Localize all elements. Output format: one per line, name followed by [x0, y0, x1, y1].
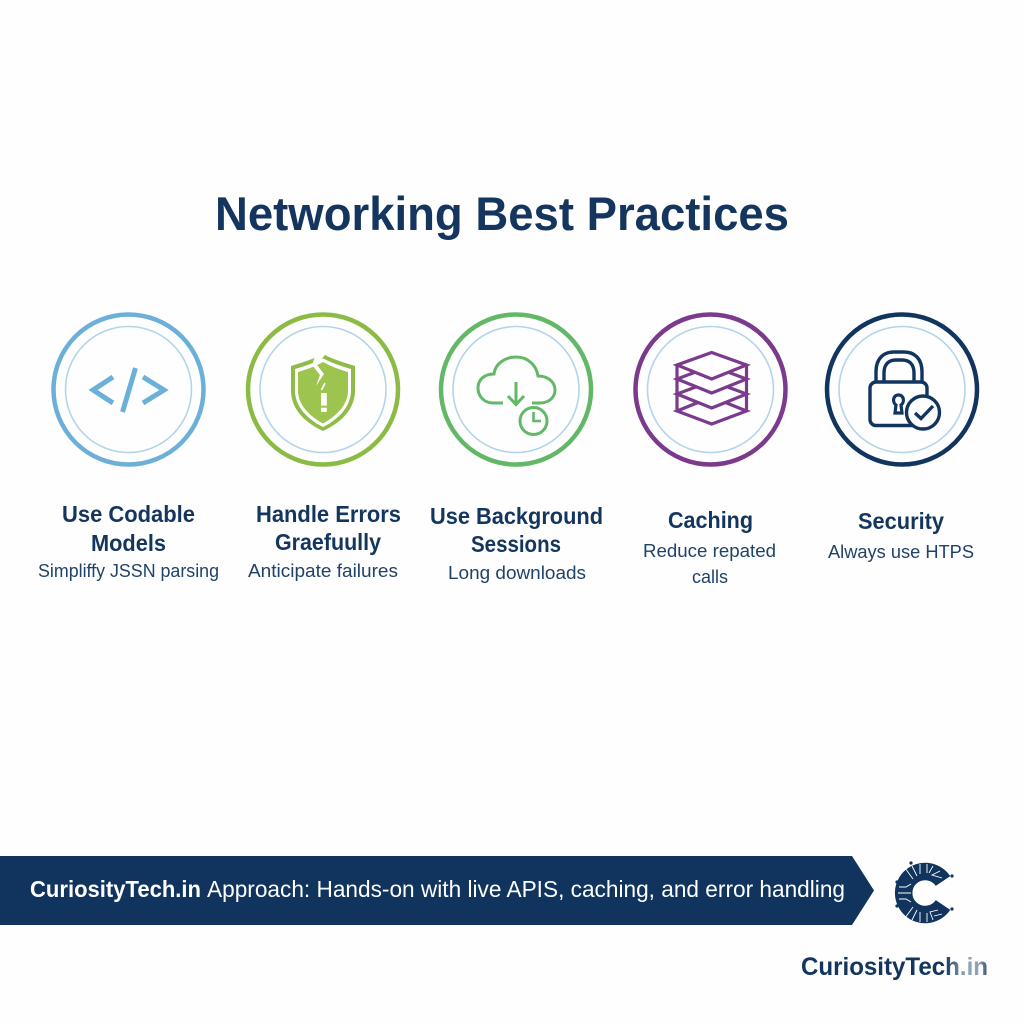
description line two: calls: [692, 566, 728, 587]
description: Reduce repated: [643, 540, 776, 561]
description: Anticipate failures: [248, 560, 398, 581]
icon: stacked layers in rings: [636, 314, 786, 464]
icon: code brackets in rings: [54, 314, 204, 464]
panel: use background sessions: [430, 314, 603, 583]
banner message: Approach: Hands-on with live APIS, caching, and error handling: [207, 876, 845, 902]
banner arrow shape: [0, 856, 874, 925]
heading line two: Sessions: [471, 531, 561, 557]
heading line two: Graefuully: [275, 529, 381, 555]
panel: caching: [636, 314, 786, 587]
description: Always use HTPS: [828, 541, 974, 562]
icon: cloud download with clock in rings: [441, 314, 591, 464]
banner brand text: CuriosityTech.in: [30, 876, 201, 902]
heading: Caching: [668, 507, 753, 533]
heading line two: Models: [91, 530, 166, 556]
icon: cracked shield in rings: [248, 314, 398, 464]
description: Simpliffy JSSN parsing: [38, 560, 219, 581]
panel: use codable models: [38, 314, 219, 581]
title: Networking Best Practices: [215, 187, 789, 240]
heading: Handle Errors: [256, 501, 401, 527]
logo wordmark: CuriosityTech.in: [801, 953, 988, 981]
icon: padlock with check in rings: [827, 314, 977, 464]
description: Long downloads: [448, 562, 586, 583]
banner: approach: [0, 856, 874, 925]
heading: Use Codable: [62, 501, 195, 527]
logo: circuit letter C: [895, 861, 954, 922]
panel: security: [827, 314, 977, 562]
panel: handle errors gracefully: [248, 314, 401, 581]
heading: Use Background: [430, 503, 603, 529]
heading: Security: [858, 508, 944, 534]
